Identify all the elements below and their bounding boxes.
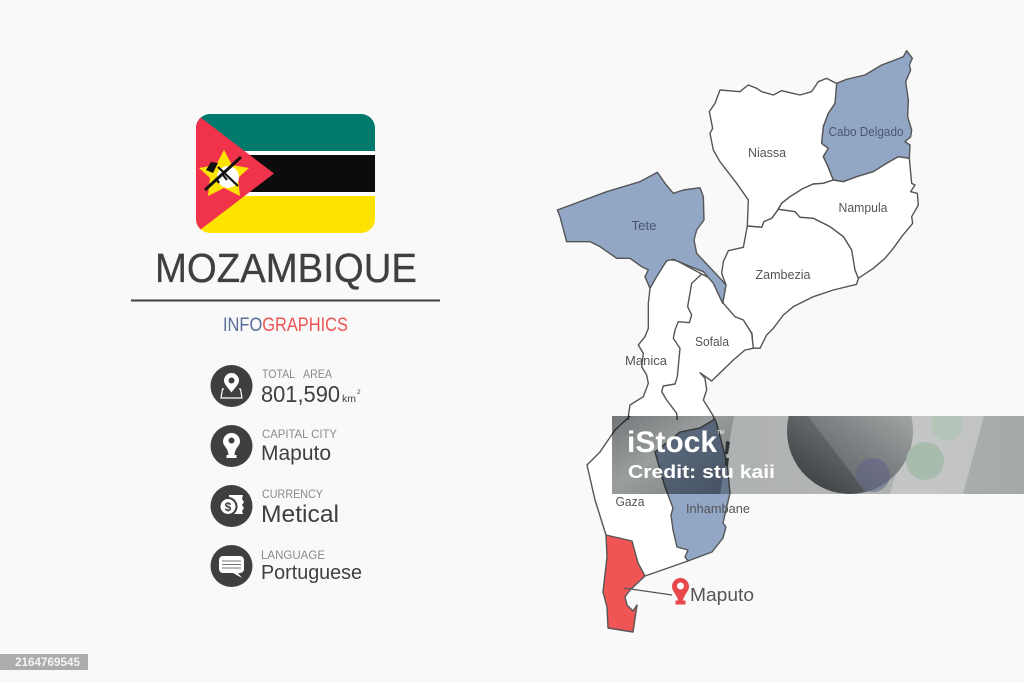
region: Tete — [557, 172, 726, 303]
watermark text: Credit: stu kaii — [628, 462, 775, 482]
icon: map pin on map — [210, 365, 252, 407]
leader line — [624, 588, 672, 595]
flag of Mozambique — [196, 114, 375, 233]
info row: capital city — [210, 425, 337, 467]
image id tag: 2164769545 — [15, 655, 80, 669]
region: Sofala — [662, 274, 753, 430]
info row: total area: 801,590 — [261, 381, 340, 407]
region: Niassa — [709, 78, 838, 227]
watermark band — [612, 416, 1024, 494]
watermark text: iStock — [627, 426, 717, 459]
region: Maputo — [603, 535, 645, 632]
map labels: Niassa — [748, 146, 786, 160]
info row: capital city: CAPITAL CITY — [262, 427, 337, 441]
map labels: Sofala — [695, 335, 729, 349]
map labels: Inhambane — [686, 502, 750, 516]
info row: total area: TOTAL — [262, 367, 295, 381]
watermark text — [627, 426, 775, 482]
map labels: Cabo Delgado — [828, 125, 904, 139]
map labels: Nampula — [838, 201, 888, 215]
map of Mozambique — [557, 51, 918, 632]
info row: total area: km — [342, 393, 356, 405]
map labels: Zambezia — [756, 268, 811, 282]
icon: coin and banknote: $ — [225, 500, 232, 514]
Maputo callout — [624, 578, 754, 605]
info row: language: LANGUAGE — [261, 548, 325, 562]
region: Zambezia — [722, 209, 858, 348]
info row: total area: AREA — [303, 367, 332, 381]
info row: total area: 2 — [357, 389, 361, 396]
region: Inhambane — [655, 419, 730, 561]
info row: currency — [210, 485, 339, 528]
map labels: Manica — [625, 354, 667, 368]
watermark text: TM — [717, 430, 724, 436]
info row: capital city: Maputo — [261, 441, 331, 465]
info row: currency: CURRENCY — [262, 487, 323, 501]
info row: language — [210, 545, 362, 587]
subtitle: INFOGRAPHICS — [223, 315, 348, 336]
map labels — [616, 125, 904, 516]
info row: currency: Metical — [261, 501, 339, 528]
icon: red map pin — [672, 578, 689, 604]
region: Manica — [628, 259, 702, 430]
region: Cabo Delgado — [822, 51, 912, 182]
icon: location pin — [210, 425, 252, 467]
info row: total area — [210, 365, 361, 407]
Maputo callout: Maputo — [690, 585, 754, 605]
title: MOZAMBIQUE — [155, 245, 417, 291]
map labels: Tete — [632, 219, 657, 233]
south coast line — [645, 561, 688, 576]
region: Nampula — [778, 157, 918, 278]
title underline — [131, 300, 440, 302]
image id tag — [0, 654, 88, 670]
info row: language: Portuguese — [261, 561, 362, 584]
coast islands seen through band — [725, 441, 730, 466]
icon: speech bubble — [210, 545, 252, 587]
region: Gaza — [587, 416, 700, 576]
map labels: Gaza — [616, 495, 645, 509]
